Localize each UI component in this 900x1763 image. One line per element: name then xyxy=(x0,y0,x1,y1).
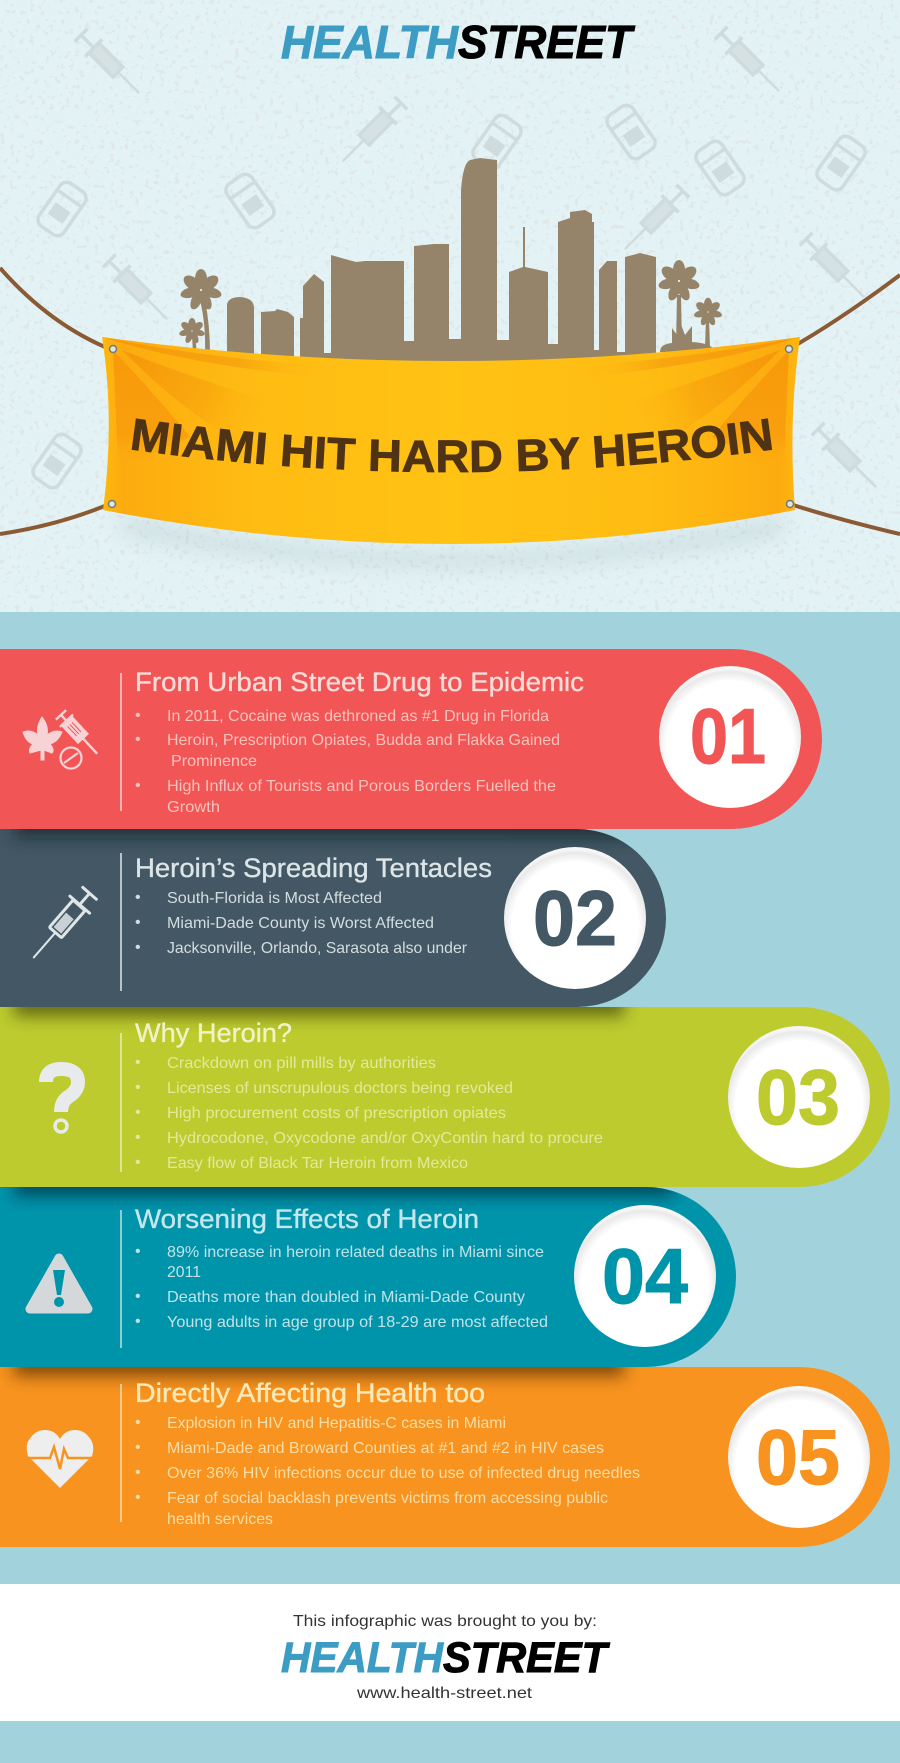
bullet list: South-Florida is Most Affected xyxy=(167,890,382,907)
divider line xyxy=(120,1210,122,1348)
bullet list xyxy=(135,889,468,957)
number badge 01: 01 xyxy=(690,692,766,780)
bullet list: Young adults in age group of 18-29 are most affected xyxy=(167,1314,548,1331)
panel shadow xyxy=(14,994,624,1016)
number badge 03 xyxy=(728,1026,870,1168)
heading: Why Heroin? xyxy=(135,1018,292,1048)
logo: HealthStreet: STREET xyxy=(458,16,636,68)
bullet list: High procurement costs of prescription opiates xyxy=(167,1105,506,1122)
bullet list: • xyxy=(135,1054,141,1071)
bullet list: Over 36% HIV infections occur due to use of infected drug needles xyxy=(167,1465,640,1482)
header background xyxy=(0,0,900,612)
bullet list: Licenses of unscrupulous doctors being revoked xyxy=(167,1080,513,1097)
bullet list: Heroin, Prescription Opiates, Budda and Flakka Gained xyxy=(167,732,560,749)
footer url: www.health-street.net xyxy=(356,1685,533,1702)
number badge 02: 02 xyxy=(533,874,617,962)
bullet list: Crackdown on pill mills by authorities xyxy=(167,1055,436,1072)
bullet list xyxy=(135,1243,548,1331)
panel 01: From Urban Street Drug to Epidemic xyxy=(0,649,822,829)
logo: HealthStreet xyxy=(281,16,636,68)
bullet list: • xyxy=(135,1079,141,1096)
heading: Worsening Effects of Heroin xyxy=(135,1204,479,1234)
bullet list: • xyxy=(135,1414,141,1431)
bullet list: • xyxy=(135,914,141,931)
bullet list: Explosion in HIV and Hepatitis-C cases in Miami xyxy=(167,1415,506,1432)
bullet list: • xyxy=(135,889,141,906)
city skyline silhouette xyxy=(227,158,656,364)
bullet list: • xyxy=(135,1154,141,1171)
bullet list: • xyxy=(135,1439,141,1456)
divider line xyxy=(120,673,122,811)
panel shadow xyxy=(8,829,628,846)
footer background xyxy=(0,1584,900,1721)
icon: warning triangle xyxy=(30,1258,88,1309)
panel shadow xyxy=(14,1354,624,1376)
banner folds xyxy=(102,337,800,470)
bullet list: Miami-Dade and Broward Counties at #1 and #2 in HIV cases xyxy=(167,1440,604,1457)
number badge 01 xyxy=(659,666,801,808)
bullet list: Growth xyxy=(167,799,220,816)
bullet list: • xyxy=(135,1243,141,1260)
header panel: banner and skyline xyxy=(0,0,900,612)
heading: Heroin’s Spreading Tentacles xyxy=(135,853,492,883)
bullet list: In 2011, Cocaine was dethroned as #1 Drug in Florida xyxy=(167,708,549,725)
bullet list: 2011 xyxy=(167,1264,201,1281)
divider line xyxy=(120,1384,122,1522)
bullet list: High Influx of Tourists and Porous Borders Fuelled the xyxy=(167,778,556,795)
footer logo xyxy=(281,1634,611,1682)
bullet list: • xyxy=(135,1489,141,1506)
banner xyxy=(102,337,800,544)
bullet list: Miami-Dade County is Worst Affected xyxy=(167,915,434,932)
number badge 03: 03 xyxy=(756,1053,840,1141)
bullet list: 89% increase in heroin related deaths in Miami since xyxy=(167,1244,544,1261)
bullet list xyxy=(135,707,560,816)
bullet list: Jacksonville, Orlando, Sarasota also under xyxy=(167,940,468,957)
heading: From Urban Street Drug to Epidemic xyxy=(135,667,584,697)
panel 05: Directly Affecting Health too xyxy=(0,1354,890,1547)
eyelets xyxy=(108,346,794,508)
bullet list xyxy=(135,1414,640,1528)
icon: question mark xyxy=(46,1069,78,1132)
banner title xyxy=(129,449,775,472)
divider line xyxy=(120,1033,122,1172)
icon: syringe xyxy=(24,885,99,966)
bullet list: • xyxy=(135,939,141,956)
number badge 02 xyxy=(504,847,646,989)
bullet list: • xyxy=(135,777,141,794)
number badge 05 xyxy=(728,1386,870,1528)
icon: leaf, syringe and pill xyxy=(23,709,104,768)
palm trees xyxy=(179,260,723,354)
footer logo: HEALTH xyxy=(281,1634,444,1682)
panel 02: Heroin's Spreading Tentacles xyxy=(0,816,666,1007)
panel 03: Why Heroin? xyxy=(0,994,890,1187)
footer panel xyxy=(0,1584,900,1721)
bullet list: • xyxy=(135,707,141,724)
banner shadow xyxy=(115,515,790,568)
bullet list: • xyxy=(135,731,141,748)
icon: heart with pulse xyxy=(27,1430,93,1488)
bullet list: health services xyxy=(167,1511,273,1528)
footer credit line: This infographic was brought to you by: xyxy=(293,1613,597,1630)
number badge 04: 04 xyxy=(602,1232,688,1320)
bullet list xyxy=(135,1054,603,1172)
footer logo: STREET xyxy=(443,1634,611,1682)
bullet list: Easy flow of Black Tar Heroin from Mexico xyxy=(167,1155,468,1172)
bullet list: Prominence xyxy=(171,753,257,770)
bullet list: Hydrocodone, Oxycodone and/or OxyContin hard to procure xyxy=(167,1130,603,1147)
panel 04: Worsening Effects of Heroin xyxy=(0,1174,736,1367)
bullet list: • xyxy=(135,1313,141,1330)
logo: HealthStreet: HEALTH xyxy=(281,16,459,68)
bullet list: • xyxy=(135,1464,141,1481)
divider line xyxy=(120,853,122,991)
background pattern: ghost syringes and pill bottles xyxy=(30,25,885,496)
panel shadow xyxy=(14,1174,674,1196)
heading: Directly Affecting Health too xyxy=(135,1378,485,1408)
bullet list: Deaths more than doubled in Miami-Dade County xyxy=(167,1289,525,1306)
ropes xyxy=(0,268,900,534)
bullet list: • xyxy=(135,1288,141,1305)
bullet list: Fear of social backlash prevents victims from accessing public xyxy=(167,1490,608,1507)
bullet list: • xyxy=(135,1104,141,1121)
number badge 05: 05 xyxy=(756,1413,840,1501)
banner: MIAMI HIT HARD BY HEROIN xyxy=(132,418,772,472)
bullet list: • xyxy=(135,1129,141,1146)
number badge 04 xyxy=(574,1205,716,1347)
